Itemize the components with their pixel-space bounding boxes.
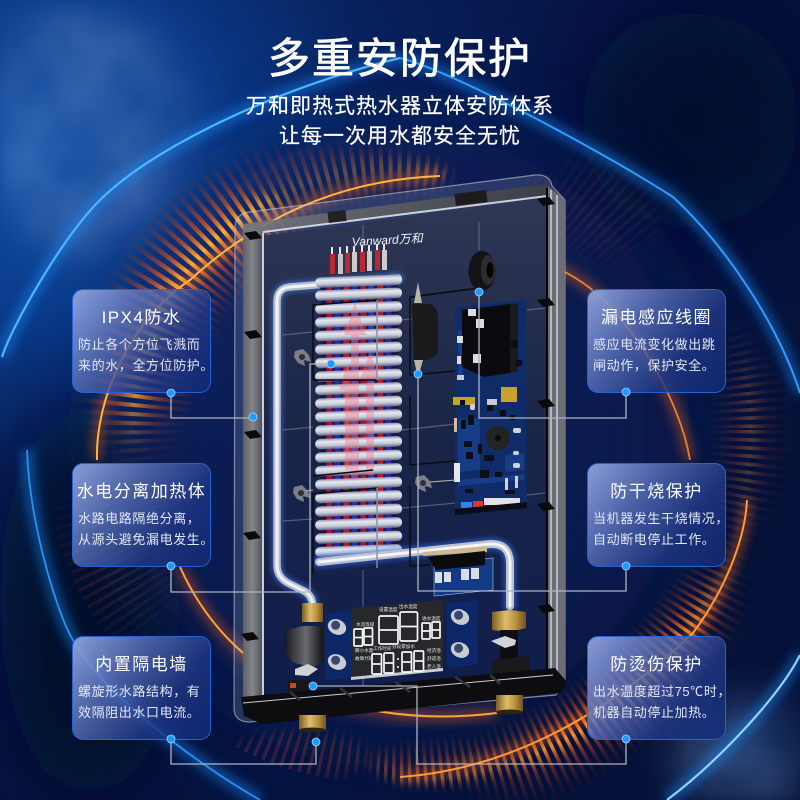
title: 多重安防保护 (268, 35, 532, 82)
inlet valve assembly (285, 603, 323, 694)
touch keys (325, 606, 472, 673)
title and subtitle (246, 35, 554, 148)
card: built-in isolation wall: 内置隔电墙 (95, 655, 188, 674)
card: leakage sensing coil: 漏电感应线圈 (601, 308, 712, 327)
central navy glow (110, 130, 690, 730)
buzzer (486, 426, 510, 450)
LCD display (351, 600, 443, 680)
LCD display: 工作时间 (373, 645, 392, 652)
blue ring: upper left (2, 58, 400, 357)
orange radial spokes, upper left (78, 144, 456, 462)
LCD display: 水流等级 (356, 621, 375, 628)
card: water-electric separated heating body: 水电分离加热体 (77, 482, 206, 501)
orange arc: upper right (437, 235, 690, 460)
outlet valve assembly (491, 610, 530, 676)
yellow capacitors (453, 397, 475, 405)
card: dry-burn protection: 当机器发生干烧情况， (593, 511, 729, 526)
card: dry-burn protection (587, 463, 726, 567)
bottom tray (241, 668, 567, 724)
card: built-in isolation wall: 效隔阻出水口电流。 (78, 704, 200, 720)
LCD display: 出水温度 (399, 603, 418, 610)
LCD display: 经济浴 (427, 647, 441, 654)
blue ring: lower right (667, 655, 800, 800)
bracket outlines (313, 288, 480, 574)
orange arcs glow (97, 176, 747, 777)
wire connectors (461, 502, 472, 508)
orange arc: upper left (97, 176, 440, 460)
heating element pins (330, 244, 387, 274)
relays (462, 304, 510, 377)
LCD display: 分段累加水 (392, 643, 415, 650)
right frame strips (548, 186, 565, 684)
logo: Vanward万和 (351, 231, 425, 249)
right blue key board (447, 600, 478, 668)
temperature fuse block (412, 282, 438, 378)
mounting tabs (241, 190, 555, 641)
left blue key board (325, 610, 352, 680)
card: dry-burn protection: 自动断电停止工作。 (593, 532, 715, 546)
LCD display: 老人浴 (427, 663, 441, 670)
card: IPX4 waterproof (72, 289, 211, 393)
card: scald protection (587, 636, 726, 740)
card: IPX4 waterproof: IPX4防水 (102, 308, 181, 327)
LCD display: 瞬小水量 (355, 647, 374, 654)
orange radial spokes, lower right (364, 335, 784, 800)
card: water-electric separated heating body: 水路电路隔绝分离， (78, 511, 200, 526)
card: water-electric separated heating body (72, 463, 211, 567)
LCD display: 舒适浴 (427, 655, 441, 662)
card: dry-burn protection: 防干烧保护 (610, 482, 703, 501)
card: built-in isolation wall: 螺旋形水路结构，有 (78, 684, 200, 699)
LCD display: 故障代码 (355, 655, 374, 662)
mounting screws (293, 349, 456, 502)
orange arc: lower right (400, 500, 747, 777)
pink heat arrows (339, 303, 380, 480)
back panel (263, 198, 548, 700)
card: scald protection: 防烫伤保护 (610, 655, 703, 674)
transparent outer shell (234, 175, 565, 722)
flow sensor board (423, 546, 493, 596)
card: built-in isolation wall (72, 636, 211, 740)
card: scald protection: 出水温度超过75℃时， (593, 684, 731, 699)
inlet pipe (277, 278, 398, 606)
subtitle line 2: 让每一次用水都安全无忧 (279, 125, 521, 148)
faint red spokes (95, 130, 695, 730)
card: leakage sensing coil: 感应电流变化做出跳 (593, 337, 715, 352)
card: IPX4 waterproof: 来的水，全方位防护。 (78, 358, 214, 372)
card: IPX4 waterproof: 防止各个方位飞溅而 (78, 337, 200, 352)
LCD display: 进水温度 (422, 615, 441, 622)
blue ring: lower left (27, 450, 260, 800)
card: scald protection: 机器自动停止加热。 (593, 704, 715, 720)
control circuit board (453, 300, 527, 515)
LCD display: 设置温度 (379, 606, 398, 613)
card: leakage sensing coil: 闸动作，保护安全。 (593, 358, 715, 372)
card: water-electric separated heating body: 从源头避免漏电发生。 (78, 532, 214, 546)
bottom brass fittings (299, 695, 523, 732)
card: leakage sensing coil (587, 289, 726, 393)
left frame strip (243, 226, 262, 701)
small components (460, 340, 522, 494)
outlet pipe (319, 544, 510, 606)
faint internal structure lines (283, 222, 545, 700)
leakage sensing coil (468, 251, 496, 291)
orange arc: lower left (180, 567, 497, 716)
top frame strip (243, 184, 547, 240)
blue ring: upper right (400, 58, 800, 393)
subtitle line 1: 万和即热式热水器立体安防体系 (246, 95, 554, 118)
coil heat exchanger (315, 274, 403, 563)
